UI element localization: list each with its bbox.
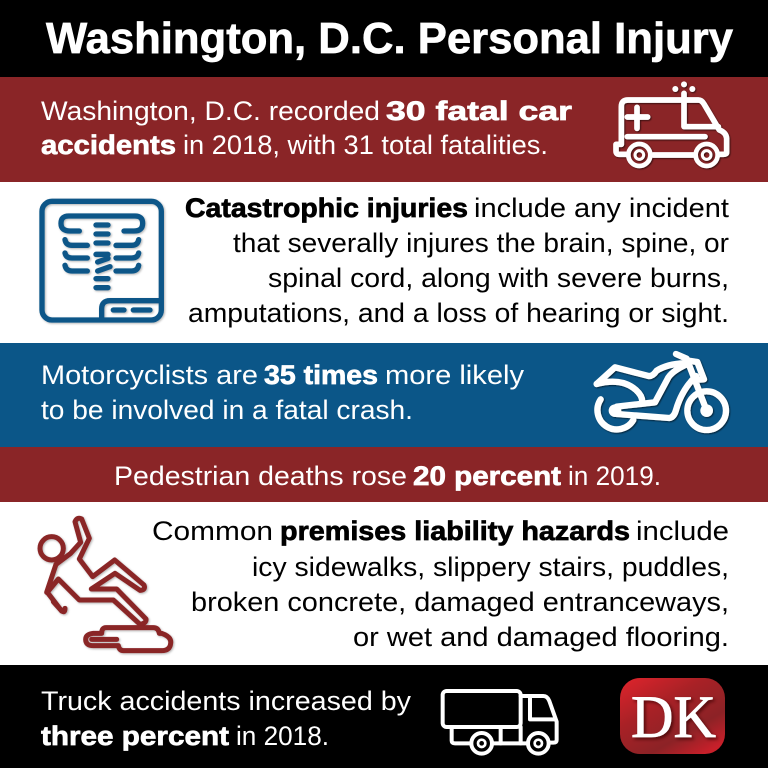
text: motorcyclists: more likely	[385, 360, 525, 390]
text: catastrophic injuries	[185, 193, 730, 328]
text: premises liability: broken concrete, damaged entranceways,	[191, 587, 729, 617]
panel: truck accidents	[0, 665, 768, 768]
text: motorcyclists: Motorcyclists are	[41, 360, 258, 390]
text: truck accidents: in 2018.	[236, 721, 329, 751]
text: fatal car accidents: Washington, D.C. recorded	[41, 96, 380, 126]
text: catastrophic injuries: include any incident	[474, 193, 730, 223]
icon: truck	[443, 691, 557, 754]
logo: DK: DK	[631, 684, 716, 750]
icon: ambulance	[616, 81, 727, 166]
text: fatal car accidents: accidents	[41, 130, 176, 160]
panel: motorcyclists	[0, 343, 768, 447]
icon: motorcycle	[597, 354, 726, 430]
text: motorcyclists: 35 times	[264, 360, 378, 390]
text: fatal car accidents	[41, 96, 573, 160]
text: pedestrian deaths: 20 percent	[413, 461, 561, 491]
text: premises liability: include	[636, 516, 729, 546]
panel: pedestrian deaths	[0, 447, 768, 502]
text: motorcyclists	[41, 360, 525, 425]
text: pedestrian deaths: Pedestrian deaths rose	[114, 461, 407, 491]
text: fatal car accidents: 30 fatal car	[386, 96, 573, 126]
title band	[0, 0, 768, 77]
text: truck accidents: three percent	[41, 721, 229, 751]
text: premises liability	[152, 516, 729, 652]
text: premises liability: Common	[152, 516, 273, 546]
icon: person slipping	[40, 518, 171, 651]
icon: chest x-ray	[42, 201, 161, 320]
text: truck accidents: Truck accidents increased by	[41, 686, 412, 716]
title: Washington, D.C. Personal Injury	[46, 14, 734, 63]
text: truck accidents	[41, 686, 412, 751]
text: pedestrian deaths	[114, 461, 661, 491]
text: motorcyclists: to be involved in a fatal crash.	[41, 395, 413, 425]
panel: catastrophic injuries	[0, 182, 768, 343]
panel: fatal car accidents	[0, 77, 768, 182]
text: fatal car accidents: in 2018, with 31 total fatalities.	[183, 130, 548, 160]
text: catastrophic injuries: spinal cord, along with severe burns,	[268, 263, 729, 293]
text: pedestrian deaths: in 2019.	[568, 461, 661, 491]
text: premises liability: icy sidewalks, slippery stairs, puddles,	[252, 552, 729, 582]
text: premises liability: or wet and damaged flooring.	[353, 622, 729, 652]
panel: premises liability	[0, 502, 768, 665]
text: catastrophic injuries: that severally injures the brain, spine, or	[233, 228, 729, 258]
text: premises liability: premises liability hazards	[280, 516, 630, 546]
text: catastrophic injuries: amputations, and a loss of hearing or sight.	[188, 298, 729, 328]
text: catastrophic injuries: Catastrophic injuries	[185, 193, 468, 223]
